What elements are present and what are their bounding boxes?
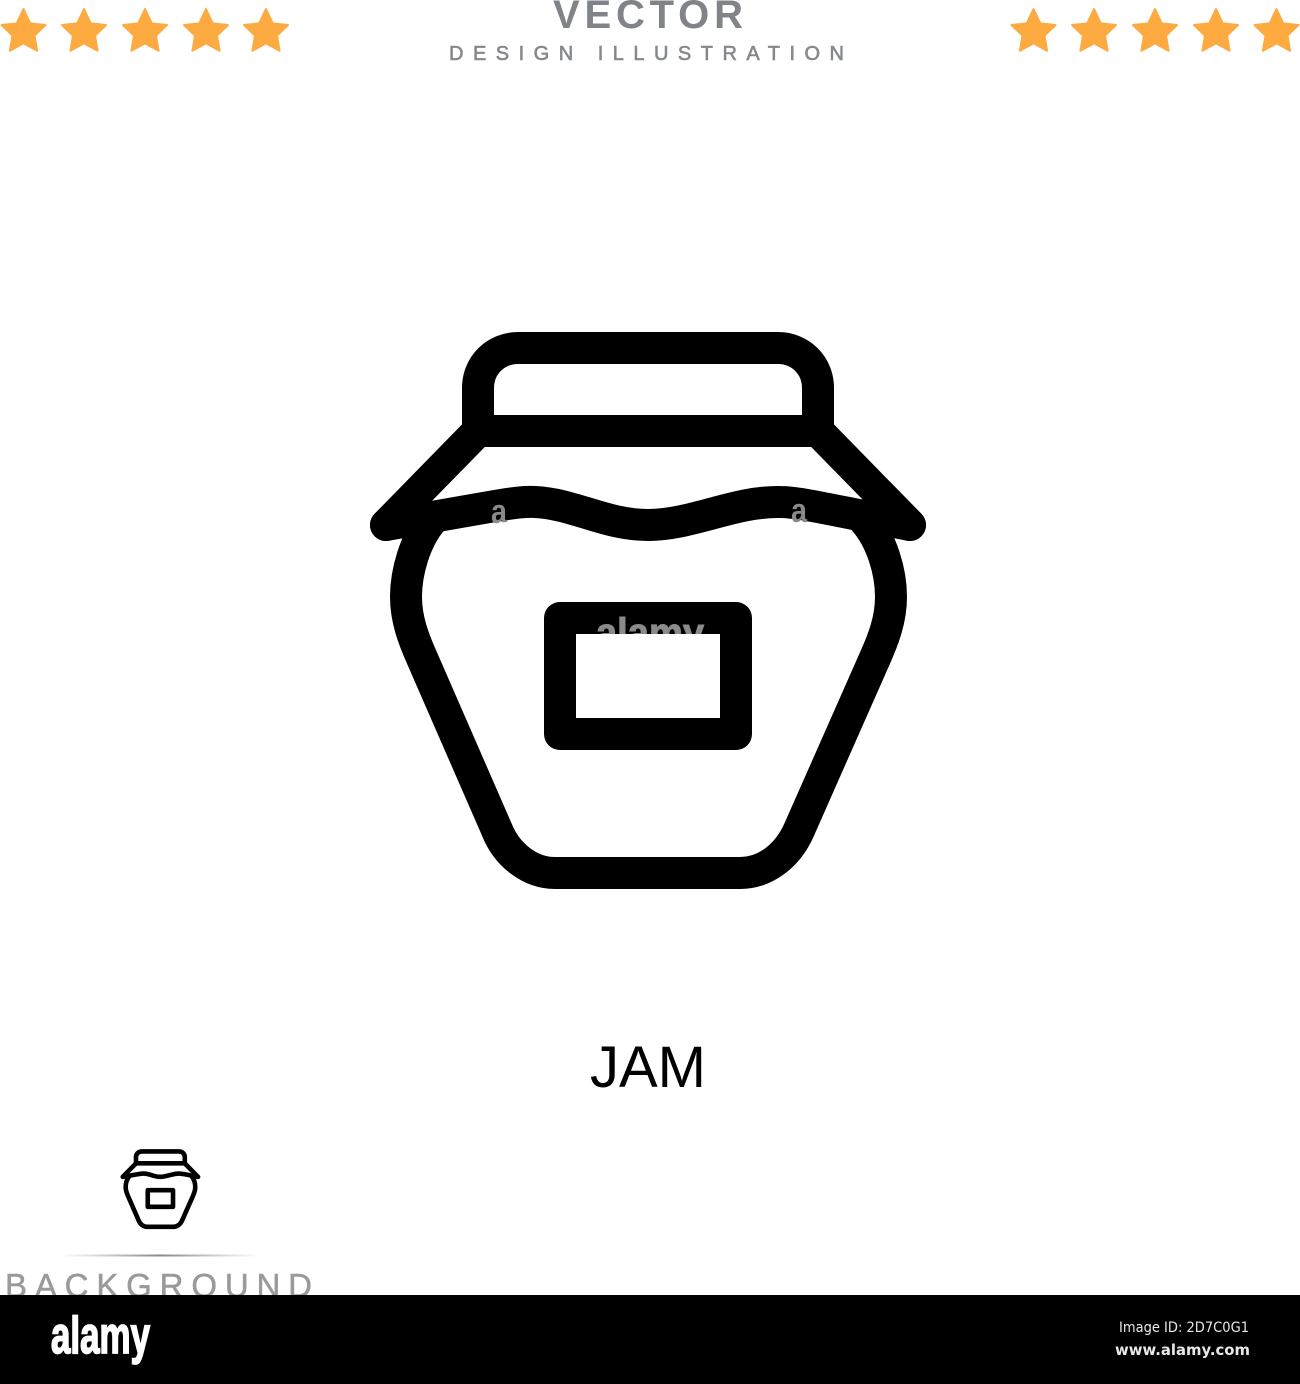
- star 6: [1012, 9, 1056, 51]
- footer bar: [0, 1295, 1300, 1384]
- jar body: [406, 520, 891, 873]
- watermark letter right: a: [791, 492, 808, 530]
- stars: top right rating: [1012, 9, 1298, 51]
- star 1: [2, 9, 46, 51]
- jar label: [560, 618, 736, 734]
- image id: Image ID: 2D7C0G1: [1119, 1320, 1249, 1336]
- icon: small jam jar: [123, 1151, 198, 1227]
- small wavy edge: [123, 1174, 198, 1177]
- small body: [126, 1176, 195, 1227]
- star 3: [123, 9, 167, 51]
- logo: alamy: alamy: [51, 1307, 150, 1365]
- divider line: [60, 1254, 260, 1256]
- watermark word on label: alamy: [596, 611, 705, 655]
- jar lid top: [478, 348, 818, 431]
- watermark fragments on main icon: [492, 504, 808, 634]
- icon: main jam jar: [386, 348, 910, 873]
- star 5: [244, 9, 288, 51]
- watermark letter left: a: [491, 493, 508, 531]
- stars: top left rating: [2, 9, 288, 51]
- website: www.alamy.com: [1115, 1341, 1250, 1359]
- caption: BACKGROUND: BACKGROUND: [5, 1267, 312, 1304]
- star 9: [1194, 9, 1238, 51]
- star 7: [1072, 9, 1116, 51]
- cloth cover sides: [386, 431, 910, 525]
- star 4: [184, 9, 228, 51]
- small cloth sides: [123, 1163, 198, 1177]
- star 2: [62, 9, 106, 51]
- title: JAM: JAM: [590, 1035, 706, 1100]
- small label: [148, 1190, 173, 1207]
- star 10: [1254, 9, 1298, 51]
- star 8: [1133, 9, 1177, 51]
- small lid: [136, 1151, 185, 1163]
- black band: [0, 1295, 1300, 1384]
- subheading: DESIGN ILLUSTRATION: DESIGN ILLUSTRATION: [449, 43, 844, 65]
- wavy cloth edge: [386, 502, 910, 525]
